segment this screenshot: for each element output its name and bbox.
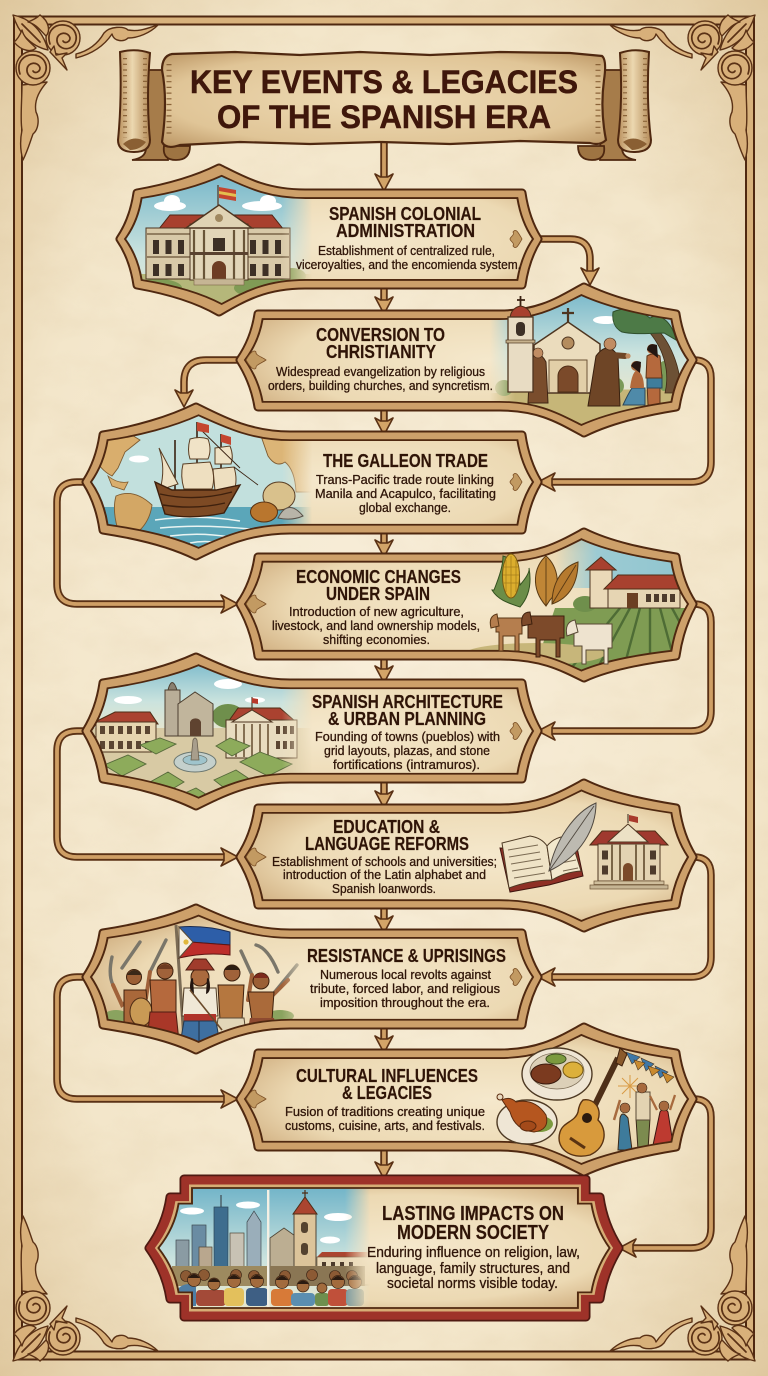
description: Enduring influence on religion, law, <box>367 1245 580 1261</box>
icon: flourish <box>246 1090 266 1108</box>
heading: CULTURAL INFLUENCES <box>296 1066 478 1086</box>
panel: The Galleon Trade <box>84 404 538 560</box>
arrow: card 8 to card 9 <box>375 1147 393 1179</box>
icon: flourish <box>510 230 522 248</box>
heading: ECONOMIC CHANGES <box>296 567 461 587</box>
heading: LASTING IMPACTS ON <box>382 1203 564 1225</box>
description: introduction of the Latin alphabet and <box>283 867 486 882</box>
arrow: banner to card 1 <box>375 143 393 191</box>
description: Fusion of traditions creating unique <box>285 1104 485 1119</box>
heading: CHRISTIANITY <box>326 342 436 362</box>
connector: card 8 right side <box>619 1099 711 1257</box>
icon: flourish <box>246 351 266 369</box>
panel: Economic Changes Under Spain <box>240 528 700 682</box>
description: global exchange. <box>359 500 451 515</box>
title banner scroll <box>118 50 651 160</box>
arrow: card 1 to card 2 <box>375 285 393 314</box>
heading <box>296 567 461 604</box>
heading <box>316 325 445 362</box>
icon: cattle <box>490 612 612 664</box>
description: grid layouts, plazas, and stone <box>324 743 490 758</box>
heading: THE GALLEON TRADE <box>323 451 488 471</box>
description: Establishment of schools and universities; <box>272 854 497 869</box>
panel: Lasting Impacts on Modern Society <box>149 1179 619 1317</box>
icon: flourish <box>510 722 522 740</box>
panel: Spanish Architecture & Urban Planning <box>84 654 538 810</box>
icon: trade goods <box>250 482 303 522</box>
heading: EDUCATION & <box>333 817 440 837</box>
description: fortifications (intramuros). <box>333 757 480 772</box>
connector: card 2 right side <box>538 360 711 491</box>
connector: card 6 right side <box>538 857 711 986</box>
panel: Education & Language Reforms <box>240 783 693 928</box>
illustration: town plaza with church and fountain <box>92 666 308 797</box>
description <box>367 1245 580 1292</box>
description <box>272 854 497 896</box>
icon: flourish <box>246 848 266 866</box>
description: societal norms visible today. <box>387 1276 558 1292</box>
description: viceroyalties, and the encomienda system. <box>296 257 521 272</box>
connector: card 7 left side <box>57 977 238 1108</box>
arrow: card 6 to card 7 <box>375 905 393 933</box>
arrow: card 7 to card 8 <box>375 1025 393 1053</box>
panel: Resistance & Uprisings <box>86 908 538 1056</box>
description <box>310 967 500 1010</box>
panel: Conversion to Christianity <box>240 284 700 440</box>
arrow: card 3 to card 4 <box>375 530 393 557</box>
connector: card 3 left side <box>57 482 238 613</box>
heading: MODERN SOCIETY <box>397 1222 550 1244</box>
illustration: fiesta dancers and bunting <box>614 1052 675 1150</box>
icon: flourish <box>246 595 266 613</box>
description <box>268 364 493 393</box>
illustration: mission church with friars <box>492 296 687 424</box>
icon: flourish <box>510 968 522 986</box>
heading <box>305 817 469 854</box>
illustration: farmland, hacienda and livestock <box>470 540 685 670</box>
icon: plate of food <box>522 1048 592 1100</box>
title text <box>190 64 578 135</box>
heading: RESISTANCE & UPRISINGS <box>307 946 506 966</box>
icon: corn <box>492 554 530 607</box>
heading <box>382 1203 564 1244</box>
arrow: card 5 to card 6 <box>375 779 393 808</box>
connector: card 2 left side <box>175 360 242 407</box>
heading: CONVERSION TO <box>316 325 445 345</box>
heading <box>296 1066 478 1103</box>
connector: card 5 left side <box>57 731 238 866</box>
description <box>272 604 480 647</box>
description: Founding of towns (pueblos) with <box>315 729 500 744</box>
heading: ADMINISTRATION <box>336 221 475 241</box>
description: Numerous local revolts against <box>320 967 491 982</box>
description: livestock, and land ownership models, <box>272 618 480 633</box>
description <box>315 729 500 772</box>
heading <box>312 692 503 729</box>
heading: LANGUAGE REFORMS <box>305 834 469 854</box>
illustration: galleon on a world map <box>92 416 310 547</box>
heading: & URBAN PLANNING <box>328 709 486 729</box>
illustration: modern skyline and heritage church with crowd <box>160 1185 380 1310</box>
description: Trans-Pacific trade route linking <box>316 472 494 487</box>
heading: UNDER SPAIN <box>326 584 430 604</box>
description: shifting economies. <box>323 632 430 647</box>
arrow: card 2 to card 3 <box>375 407 393 435</box>
description: language, family structures, and <box>376 1261 570 1277</box>
description: Manila and Acapulco, facilitating <box>315 486 496 501</box>
description: Spanish loanwords. <box>332 881 436 896</box>
description: Establishment of centralized rule, <box>318 243 495 258</box>
description: imposition throughout the era. <box>320 995 490 1010</box>
description: tribute, forced labor, and religious <box>310 981 500 996</box>
description <box>296 243 521 272</box>
description: orders, building churches, and syncretism. <box>268 378 493 393</box>
description <box>285 1104 485 1133</box>
panel: Cultural Influences & Legacies <box>240 1027 693 1172</box>
illustration: Filipino revolutionaries with flag <box>107 924 299 1041</box>
icon: university building <box>590 814 668 889</box>
description: Introduction of new agriculture, <box>289 604 464 619</box>
description <box>315 472 496 515</box>
illustration: colonial government palace <box>126 176 310 303</box>
description: customs, cuisine, arts, and festivals. <box>285 1118 485 1133</box>
corner ornament: top right <box>610 15 755 160</box>
heading: SPANISH ARCHITECTURE <box>312 692 503 712</box>
icon: flourish <box>510 473 522 491</box>
corner ornament: bottom left <box>13 1216 158 1361</box>
panel: Spanish Colonial Administration <box>118 165 538 315</box>
arrow: card 4 to card 5 <box>375 656 393 683</box>
heading: SPANISH COLONIAL <box>329 204 481 224</box>
title text: OF THE SPANISH ERA <box>217 99 551 135</box>
connector: card 1 right side <box>536 239 599 285</box>
icon: roast chicken <box>497 1094 557 1144</box>
description: Widespread evangelization by religious <box>276 364 485 379</box>
icon: open book and quill <box>500 803 596 892</box>
title text: KEY EVENTS & LEGACIES <box>190 64 578 100</box>
icon: guitar <box>559 1048 627 1156</box>
corner ornament: top left <box>13 15 158 160</box>
corner ornament: bottom right <box>610 1216 755 1361</box>
icon: tobacco leaves <box>535 556 578 606</box>
connector: card 4 right side <box>538 604 711 740</box>
icon: bell tower <box>506 296 535 392</box>
heading <box>329 204 481 241</box>
heading: & LEGACIES <box>342 1083 432 1103</box>
